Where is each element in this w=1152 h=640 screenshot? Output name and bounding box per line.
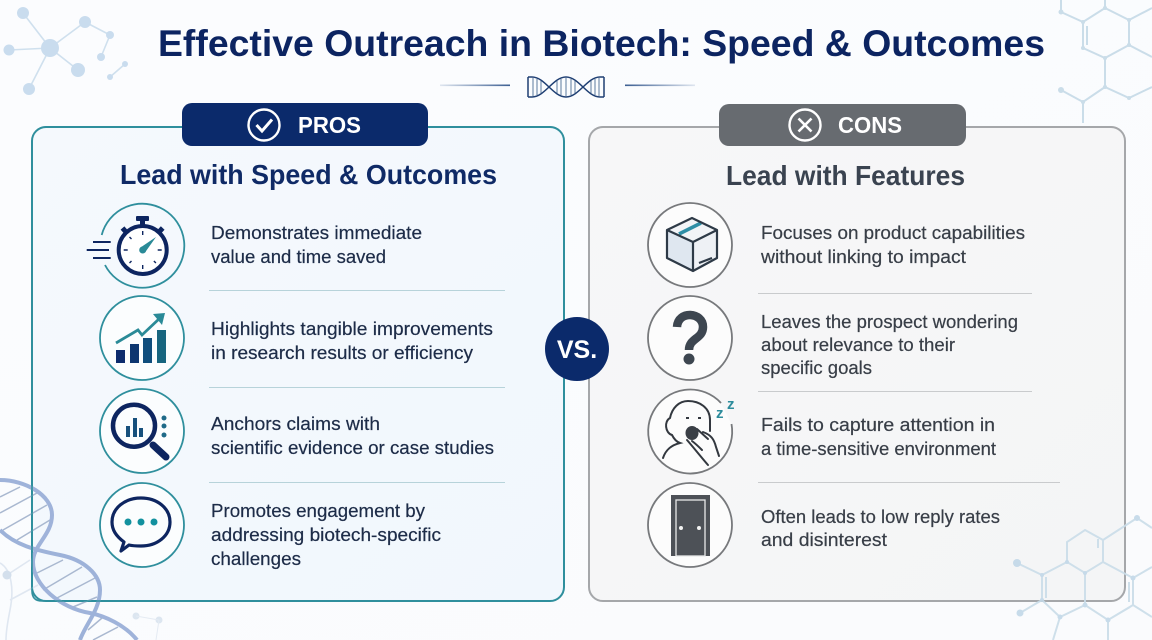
badge: cons: CONS bbox=[838, 112, 902, 138]
heading: pros: Lead with Speed & Outcomes bbox=[120, 159, 497, 190]
text: pro 4: addressing biotech-specific bbox=[211, 525, 441, 545]
icon: stopwatch bbox=[87, 204, 184, 288]
text: con 1 bbox=[760, 223, 1025, 267]
decoration: hexagons top right bbox=[1058, 0, 1152, 123]
panel: pros bbox=[32, 103, 564, 601]
badge: pros: PROS bbox=[298, 112, 361, 138]
icon: question mark bbox=[648, 296, 732, 380]
text: pro 4: Promotes engagement by bbox=[211, 501, 425, 521]
icon: yawning face bbox=[648, 390, 734, 474]
text: pro 2 bbox=[211, 319, 493, 363]
text: con 4 bbox=[761, 507, 1000, 550]
text: con 2: Leaves the prospect wondering bbox=[761, 312, 1018, 332]
text: pro 3: scientific evidence or case studies bbox=[211, 438, 494, 458]
icon: yawning face: z bbox=[727, 396, 734, 413]
icon: yawning face: z bbox=[716, 405, 724, 422]
text: con 2: about relevance to their bbox=[761, 335, 955, 355]
text: con 2: specific goals bbox=[761, 358, 872, 378]
text: pro 2: in research results or efficiency bbox=[211, 343, 473, 363]
icon: closed door bbox=[648, 483, 732, 567]
text: pro 4: challenges bbox=[211, 549, 301, 569]
icon: speech bubble bbox=[100, 483, 184, 567]
decoration: hexagons bottom right bbox=[1013, 515, 1152, 640]
text: pro 3 bbox=[211, 414, 494, 458]
decoration: molecule top left bbox=[4, 7, 128, 95]
decoration: DNA helix bottom left bbox=[0, 440, 180, 640]
panel: cons bbox=[589, 104, 1125, 601]
text: pro 1: Demonstrates immediate bbox=[211, 223, 422, 243]
icon: growth chart bbox=[100, 296, 184, 380]
vs badge: VS. bbox=[557, 336, 597, 364]
divider with DNA icon bbox=[440, 77, 695, 97]
text: con 4: Often leads to low reply rates bbox=[761, 507, 1000, 527]
text: pro 1: value and time saved bbox=[211, 247, 386, 267]
text: pro 1 bbox=[211, 223, 422, 267]
badge: cons bbox=[719, 104, 966, 146]
text: pro 3: Anchors claims with bbox=[211, 414, 380, 434]
text: con 3: Fails to capture attention in bbox=[761, 415, 995, 435]
icon: box bbox=[648, 203, 732, 287]
text: con 3: a time-sensitive environment bbox=[761, 439, 996, 459]
badge: pros bbox=[182, 103, 428, 146]
heading: cons: Lead with Features bbox=[726, 160, 965, 191]
text: pro 2: Highlights tangible improvements bbox=[211, 319, 493, 339]
text: con 4: and disinterest bbox=[761, 530, 887, 550]
vs badge bbox=[545, 317, 609, 381]
text: con 2 bbox=[761, 312, 1018, 378]
text: con 1: without linking to impact bbox=[760, 247, 966, 267]
text: con 1: Focuses on product capabilities bbox=[761, 223, 1025, 243]
title: Effective Outreach in Biotech: Speed & Outcomes bbox=[158, 23, 1045, 64]
text: con 3 bbox=[761, 415, 996, 459]
icon: magnifier with data bbox=[100, 389, 184, 473]
text: pro 4 bbox=[211, 501, 441, 569]
